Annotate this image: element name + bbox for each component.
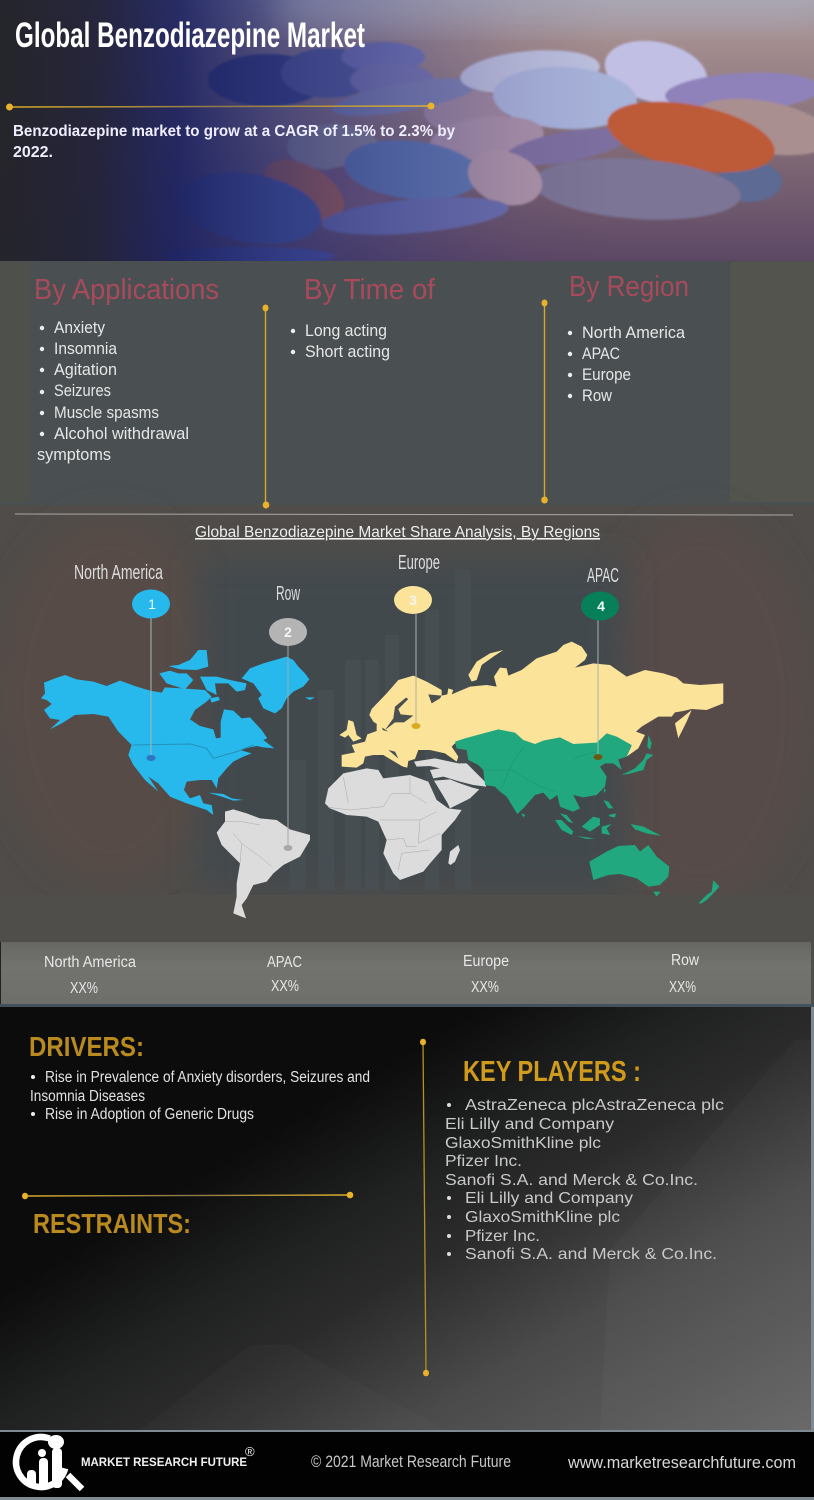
label: north america xyxy=(44,954,136,997)
list: time of action xyxy=(291,322,390,361)
marker 4: apac: 4 xyxy=(597,598,605,614)
heading: drivers: DRIVERS: xyxy=(29,1031,144,1062)
list: applications: Insomnia xyxy=(54,340,118,358)
panel: by applications xyxy=(34,274,219,464)
heading: by time of: By Time of xyxy=(304,274,436,306)
list: applications: Seizures xyxy=(54,382,111,400)
marker 3: europe: 3 xyxy=(409,592,417,608)
map: europe and russia xyxy=(339,642,723,768)
label: europe: XX% xyxy=(471,979,499,996)
copyright: © 2021 Market Research Future xyxy=(311,1453,511,1471)
title: Global Benzodiazepine Market xyxy=(15,16,365,55)
marker 2: rest of world: 2 xyxy=(284,624,292,640)
heading: by region: By Region xyxy=(569,271,689,303)
panel: drivers xyxy=(29,1031,370,1123)
marker 1: north america: 1 xyxy=(148,596,156,612)
footer xyxy=(0,1430,814,1500)
subtitle: Benzodiazepine market to grow at a CAGR of 1.5% to 2.3% by xyxy=(13,123,455,140)
list: regions: North America xyxy=(582,324,686,342)
label: europe xyxy=(463,953,509,996)
background: segments and map backdrop xyxy=(0,261,814,942)
panel: by region xyxy=(568,271,689,405)
marker 3: europe xyxy=(394,552,440,729)
list: applications: Anxiety xyxy=(54,319,106,337)
list: applications: Alcohol withdrawal xyxy=(54,425,189,443)
marker 1: north america: North America xyxy=(74,562,164,584)
panel: by time of xyxy=(291,274,436,361)
heading: key players: KEY PLAYERS : xyxy=(463,1056,641,1088)
label: apac xyxy=(267,954,302,995)
panel: drivers restraints key players background xyxy=(0,1007,814,1430)
heading: restraints: RESTRAINTS: xyxy=(33,1208,191,1239)
marker 4: apac: APAC xyxy=(587,565,619,587)
map: rest of world south america africa middle east xyxy=(217,758,487,918)
subtitle: 2022. xyxy=(13,144,53,161)
list: drivers xyxy=(30,1069,370,1123)
list: key players: Sanofi S.A. and Merck & Co.Inc. xyxy=(465,1246,717,1263)
list: regions: Row xyxy=(582,387,612,405)
list: key players: AstraZeneca plcAstraZeneca plc xyxy=(465,1097,724,1114)
label: apac: APAC xyxy=(267,954,302,971)
marker 3: europe: Europe xyxy=(398,552,440,574)
divider: vertical key players xyxy=(420,1039,429,1376)
icon: market research future logo xyxy=(10,1431,82,1493)
list: key players xyxy=(445,1097,724,1263)
list: key players: Sanofi S.A. and Merck & Co.Inc. xyxy=(445,1172,698,1189)
hero banner: pills photo xyxy=(0,0,814,265)
list: time of action: Long acting xyxy=(305,322,387,340)
website: www.marketresearchfuture.com xyxy=(567,1454,796,1472)
list: applications xyxy=(37,319,189,464)
heading: by applications: By Applications xyxy=(34,274,219,306)
list: drivers: Rise in Prevalence of Anxiety disorders, Seizures and xyxy=(45,1069,370,1086)
map: north america xyxy=(41,650,315,815)
list: key players: Pfizer Inc. xyxy=(445,1153,522,1170)
subtitle xyxy=(13,123,455,161)
list: key players: GlaxoSmithKline plc xyxy=(445,1135,601,1152)
list: key players: Eli Lilly and Company xyxy=(465,1190,633,1207)
list: applications: Muscle spasms xyxy=(54,404,159,422)
marker 2: rest of world xyxy=(269,583,307,851)
divider: drivers and restraints xyxy=(22,1192,353,1199)
list: drivers: Insomnia Diseases xyxy=(30,1088,145,1105)
list: key players: Eli Lilly and Company xyxy=(445,1116,614,1133)
label: row: Row xyxy=(671,952,700,969)
list: regions: Europe xyxy=(582,366,631,384)
map heading: Global Benzodiazepine Market Share Analysis, By Regions xyxy=(195,524,600,541)
label: north america: XX% xyxy=(70,980,98,997)
list: regions: APAC xyxy=(582,345,620,363)
label: row xyxy=(669,952,700,996)
list: time of action: Short acting xyxy=(305,343,390,361)
market share table strip xyxy=(0,942,814,1007)
list: key players: Pfizer Inc. xyxy=(465,1228,540,1245)
label: apac: XX% xyxy=(271,978,299,995)
marker 4: apac xyxy=(581,565,619,760)
label: north america: North America xyxy=(44,954,136,971)
brand name xyxy=(81,1444,255,1469)
divider: applications and time xyxy=(262,304,269,508)
panel: key players xyxy=(445,1056,724,1263)
gold divider line xyxy=(6,102,434,110)
list: key players: GlaxoSmithKline plc xyxy=(465,1209,620,1226)
marker 1: north america xyxy=(74,562,170,761)
brand name: ® xyxy=(245,1444,255,1459)
list: regions xyxy=(568,324,686,405)
brand name: MARKET RESEARCH FUTURE xyxy=(81,1455,247,1469)
label: europe: Europe xyxy=(463,953,509,970)
marker 2: rest of world: Row xyxy=(276,583,300,605)
list: applications: Agitation xyxy=(54,361,117,379)
world map xyxy=(41,642,723,918)
divider: time and region xyxy=(541,300,548,504)
map: asia pacific xyxy=(455,729,719,903)
label: row: XX% xyxy=(669,979,696,996)
list: drivers: Rise in Adoption of Generic Drugs xyxy=(45,1106,254,1123)
list: applications: symptoms xyxy=(37,446,111,464)
